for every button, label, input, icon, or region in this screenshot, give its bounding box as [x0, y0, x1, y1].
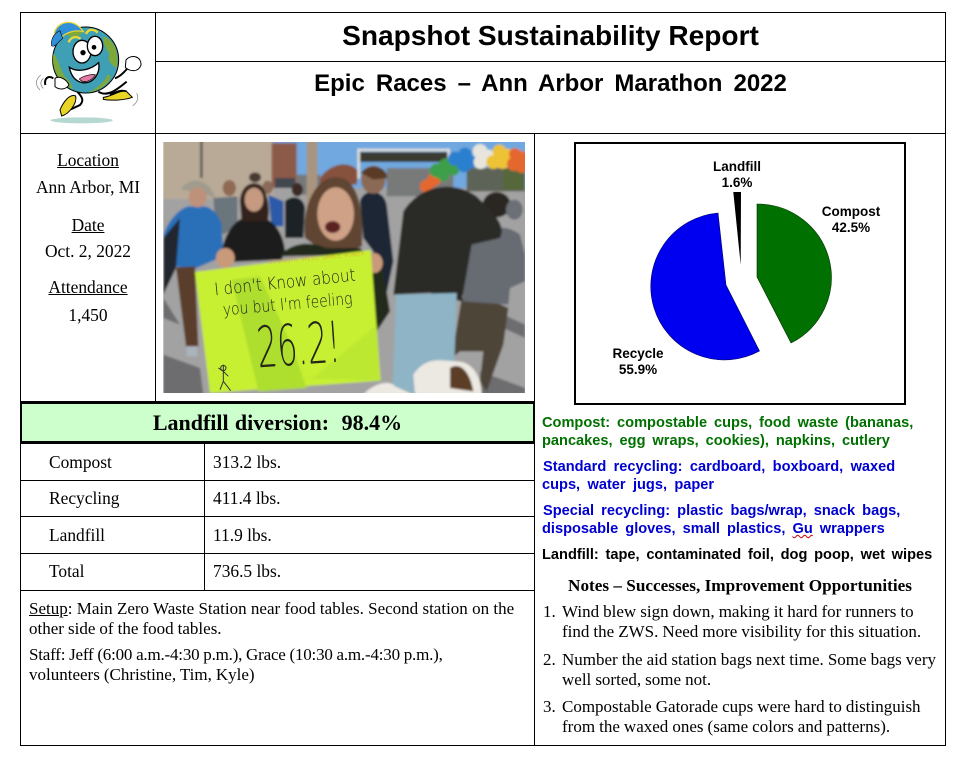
landfill diversion banner: Landfill diversion: 98.4% — [153, 410, 402, 435]
event details — [36, 150, 140, 325]
note 2: 2. — [543, 650, 556, 669]
event details: Date — [72, 215, 104, 235]
special recycling materials: Special recycling: plastic bags/wrap, snack bags, — [543, 503, 900, 519]
staff note: Staff: Jeff (6:00 a.m.-4:30 p.m.), Grace (10:30 a.m.-4:30 p.m.), — [29, 645, 443, 664]
row: total: 736.5 lbs. — [213, 561, 281, 581]
man in navy — [358, 191, 394, 292]
note 1 — [543, 602, 921, 640]
sign lettering — [216, 252, 364, 368]
row: total: Total — [49, 561, 84, 581]
row: compost: 313.2 lbs. — [213, 452, 281, 472]
row: landfill — [49, 525, 272, 545]
staff note: volunteers (Christine, Tim, Kyle) — [29, 664, 255, 684]
label: recycle: Recycle — [612, 346, 664, 361]
balloon arch — [420, 144, 529, 193]
row: landfill: Landfill — [49, 525, 105, 545]
event details: 1,450 — [68, 305, 108, 325]
sign lettering: STRENGTH, SPEED, GRACE, POWER — [268, 252, 365, 266]
icon: running earth mascot — [36, 22, 142, 124]
row: landfill: 11.9 lbs. — [213, 525, 272, 545]
note 2: Number the aid station bags next time. Some bags very — [562, 650, 936, 669]
event details: Oct. 2, 2022 — [45, 241, 131, 261]
event details: Ann Arbor, MI — [36, 177, 140, 197]
row: compost: Compost — [49, 452, 112, 472]
man in grey and dark jackets — [452, 298, 508, 391]
landfill materials: Landfill: tape, contaminated foil, dog poop, wet wipes — [542, 547, 932, 563]
woman in blue — [163, 206, 223, 269]
row: compost — [49, 452, 281, 472]
photo: runner holding a neon sign — [163, 142, 525, 393]
cap visor — [51, 31, 63, 46]
sign lettering: 26.2! — [255, 310, 342, 381]
note 3: Compostable Gatorade cups were hard to distinguish — [562, 697, 921, 716]
row: recycling: 411.4 lbs. — [213, 488, 280, 508]
setup note: other side of the food tables. — [29, 618, 222, 638]
title: Snapshot Sustainability Report — [342, 20, 759, 51]
slice: compost — [757, 204, 831, 343]
setup note — [29, 599, 514, 638]
cap crown — [54, 22, 83, 38]
ground shadows — [163, 298, 203, 395]
slice: landfill — [733, 192, 741, 265]
pie chart — [574, 142, 906, 405]
compost materials: Compost: compostable cups, food waste (bananas, — [542, 415, 913, 431]
label: compost: Compost — [822, 204, 881, 219]
standard recycling materials: cups, water jugs, paper — [542, 477, 714, 493]
label: compost: 42.5% — [832, 220, 870, 235]
staff note — [29, 645, 443, 684]
note 3: 3. — [543, 697, 556, 716]
special recycling materials: disposable gloves, small plastics, Gu wrappers — [542, 521, 885, 537]
standard recycling materials: Standard recycling: cardboard, boxboard, waxed — [543, 459, 895, 475]
waste table — [21, 444, 534, 591]
event details: Location — [57, 150, 119, 170]
setup note: Setup: Main Zero Waste Station near food tables. Second station on the — [29, 599, 514, 618]
subtitle: Epic Races – Ann Arbor Marathon 2022 — [314, 70, 787, 97]
compost materials: pancakes, egg wraps, cookies), napkins, cutlery — [542, 433, 890, 449]
woman in black — [222, 217, 285, 262]
label: landfill: Landfill — [713, 159, 761, 174]
label: landfill: 1.6% — [722, 175, 752, 190]
slice: recycle — [651, 213, 760, 360]
note 1: 1. — [543, 602, 556, 621]
event details: Attendance — [48, 277, 128, 297]
row: recycling: Recycling — [49, 488, 120, 508]
label: recycle: 55.9% — [619, 362, 657, 377]
note 2 — [543, 650, 936, 688]
dog — [363, 383, 413, 395]
special recycling materials — [542, 503, 900, 538]
note 1: find the ZWS. Need more visibility for this situation. — [562, 622, 921, 640]
row: recycling — [49, 488, 280, 508]
people behind — [213, 196, 237, 235]
landfill diversion banner — [20, 401, 535, 444]
note 2: well sorted, some not. — [562, 670, 711, 688]
note 3: from the waxed ones (same colors and patterns). — [562, 716, 890, 736]
neon sign board — [195, 250, 381, 393]
compost materials — [542, 415, 913, 449]
sign lettering: you but I'm feeling — [222, 289, 353, 319]
note 1: Wind blew sign down, making it hard for runners to — [562, 602, 914, 621]
chart frame — [575, 143, 905, 404]
notes heading: Notes – Successes, Improvement Opportunities — [568, 576, 912, 595]
standard recycling materials — [542, 459, 895, 493]
sign lettering: I don't Know about — [213, 266, 356, 300]
row: total — [49, 561, 281, 581]
note 3 — [543, 697, 921, 736]
girl — [305, 177, 362, 251]
